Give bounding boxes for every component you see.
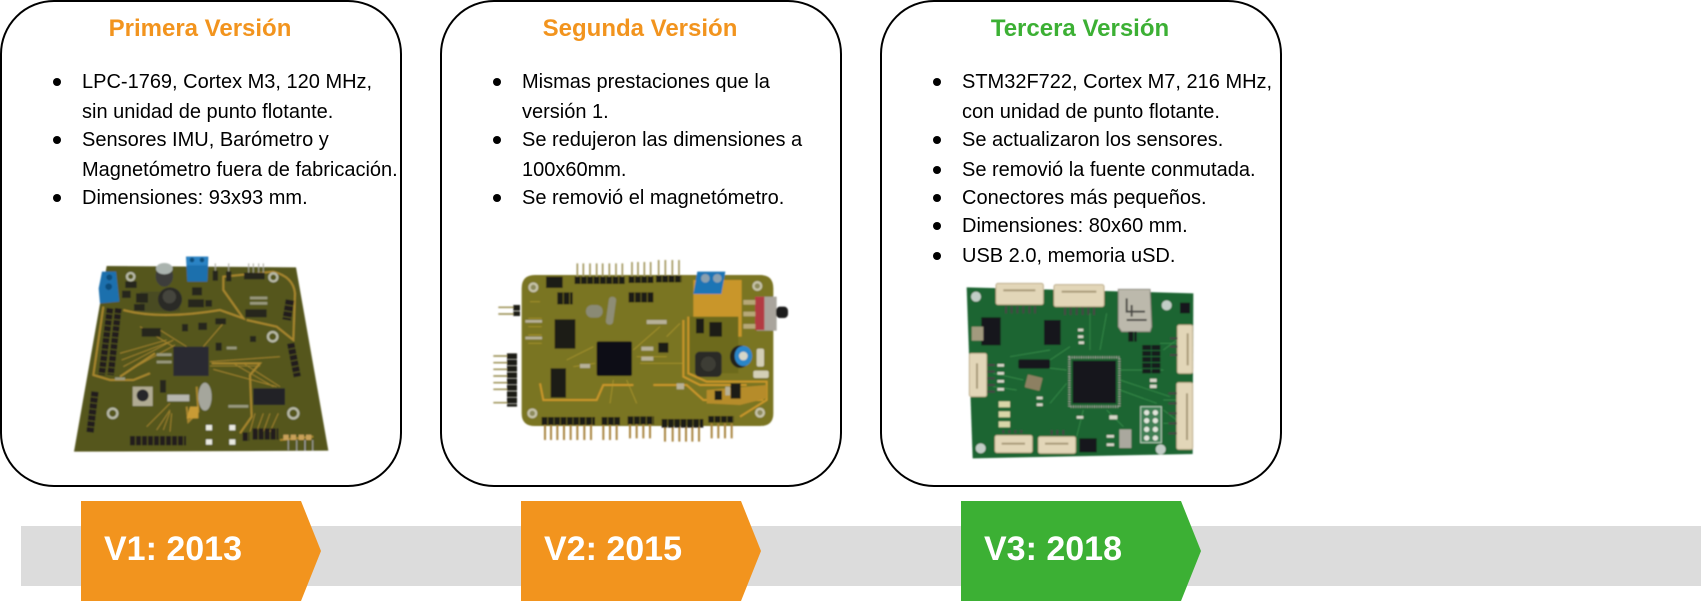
timeline bar [21, 526, 1701, 586]
arrow: V2 2015: V2: 2015 [544, 530, 682, 568]
mcu [597, 341, 632, 376]
arrow: V3 2018 [961, 501, 1201, 601]
bullet list: tercera versión [933, 71, 1272, 267]
bullet list: tercera versión: USB 2.0, memoria uSD. [962, 245, 1175, 267]
image: placa versión 1 [73, 255, 330, 453]
dark parts [981, 303, 1190, 452]
bullet list: segunda versión: 100x60mm. [522, 159, 626, 181]
image: placa versión 2 [492, 259, 790, 443]
heading: primera versión: Primera Versión [109, 15, 291, 42]
panel: segunda versión [440, 0, 842, 487]
terminal [693, 272, 725, 294]
bullet list: tercera versión: STM32F722, Cortex M7, 216 MHz, [962, 71, 1272, 93]
holes [971, 292, 1172, 454]
inductor and capacitor [695, 352, 722, 377]
bullet list: primera versión [53, 71, 398, 209]
leds [206, 425, 235, 445]
bullet list: tercera versión: Dimensiones: 80x60 mm. [962, 215, 1188, 237]
crystals [586, 305, 603, 318]
bullet list: segunda versión: Se removió el magnetómetro. [522, 187, 784, 209]
header [1128, 337, 1156, 373]
usb [1118, 289, 1152, 332]
mcu [1073, 361, 1116, 403]
inductor [158, 287, 182, 311]
bullet list: primera versión: sin unidad de punto flotante. [82, 101, 333, 123]
spi pads [1141, 407, 1161, 443]
bullet list: segunda versión: versión 1. [522, 101, 609, 123]
bullet list: segunda versión: Se redujeron las dimensiones a [522, 129, 802, 151]
bullet list: segunda versión [493, 71, 802, 209]
heading: segunda versión: Segunda Versión [543, 15, 737, 42]
button [133, 387, 153, 406]
terminal [186, 257, 208, 282]
arrow: V2 2015 [521, 501, 761, 601]
arrow: V1 2013: V1: 2013 [104, 530, 242, 568]
bullet list: tercera versión: Se removió la fuente conmutada. [962, 159, 1256, 181]
crystal [167, 395, 189, 401]
mcu [173, 347, 209, 376]
image: placa versión 3 [966, 282, 1194, 460]
heading: tercera versión: Tercera Versión [991, 15, 1169, 42]
holes [108, 273, 298, 418]
pins top [493, 260, 679, 403]
bullet list: primera versión: Magnetómetro fuera de fabricación. [82, 159, 398, 181]
capacitor [156, 265, 173, 287]
bullet list: primera versión: LPC-1769, Cortex M3, 120 MHz, [82, 71, 372, 93]
arrow: V1 2013 [81, 501, 321, 601]
switch [757, 297, 777, 331]
bullet list: segunda versión: Mismas prestaciones que la [522, 71, 770, 93]
holes [527, 281, 765, 418]
dark parts [546, 277, 741, 400]
white connectors [969, 283, 1193, 453]
bullet list: primera versión: Sensores IMU, Barómetro y [82, 129, 329, 151]
crystal part [1119, 429, 1131, 448]
bullet list: primera versión: Dimensiones: 93x93 mm. [82, 187, 308, 209]
headers [90, 300, 297, 441]
resistors [115, 297, 267, 408]
panel: primera versión [0, 0, 402, 487]
bullet list: tercera versión: con unidad de punto flotante. [962, 101, 1220, 123]
panel: tercera versión [880, 0, 1282, 487]
leds and smd [999, 401, 1010, 427]
bullet list: tercera versión: Conectores más pequeños. [962, 187, 1207, 209]
arrow: V3 2018: V3: 2018 [984, 530, 1122, 568]
smd light [753, 349, 769, 378]
headers [512, 279, 734, 423]
small smd [122, 271, 267, 393]
bullet list: tercera versión: Se actualizaron los sensores. [962, 129, 1223, 151]
